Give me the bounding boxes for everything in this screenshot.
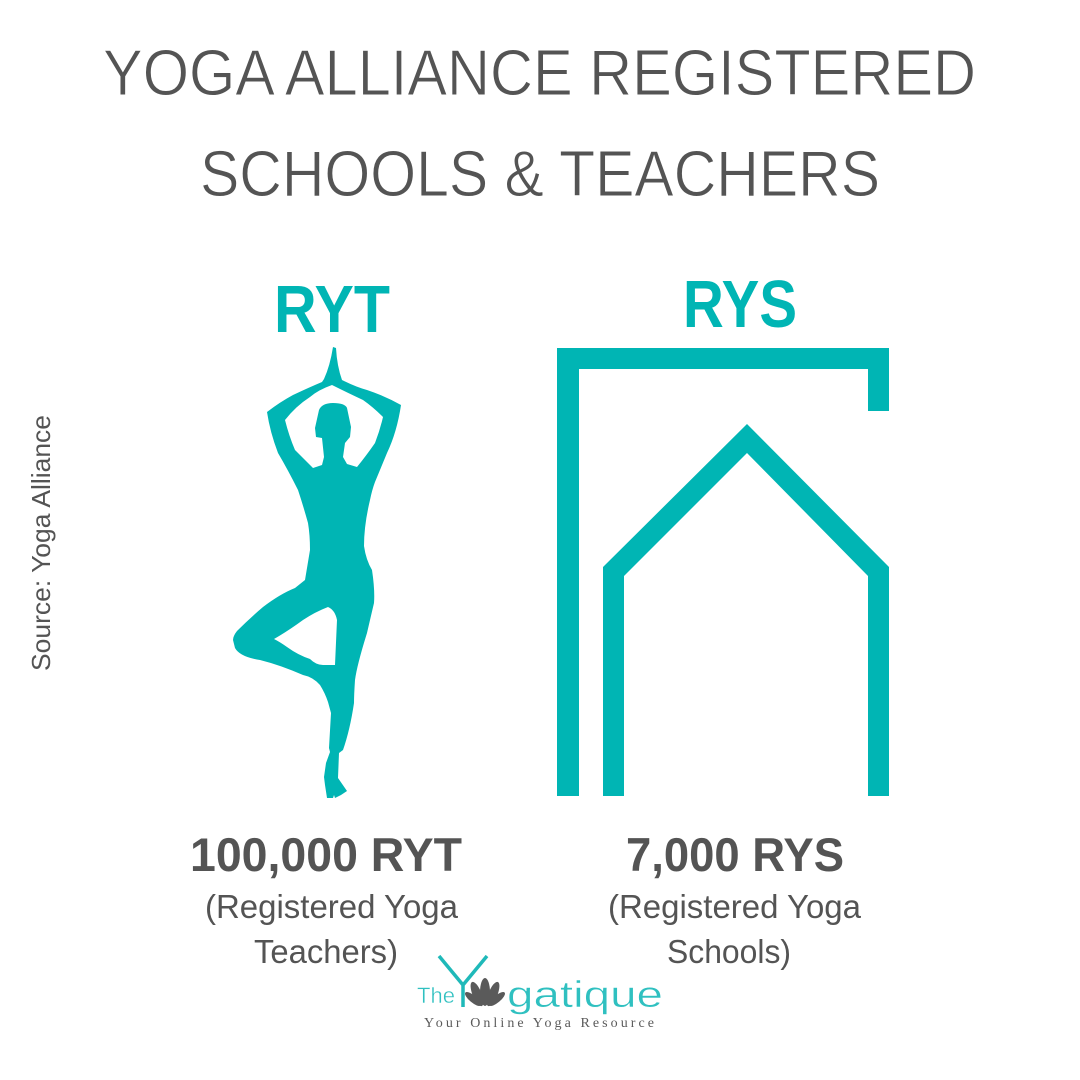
logo: The Yogatique: The [417,983,455,1008]
stat: RYS count: Schools) [667,933,791,970]
logo: The Yogatique [417,956,663,1031]
house outline [603,424,889,796]
title: SCHOOLS & TEACHERS [200,137,880,210]
stat: RYS count: (Registered Yoga [608,888,862,925]
stat: RYT count: 100,000 RYT [190,828,462,881]
icon: lotus [463,978,507,1008]
heading: RYT: RYT [274,272,390,347]
stat: RYS count: 7,000 RYS [626,828,844,881]
title: YOGA ALLIANCE REGISTERED [103,36,976,109]
heading: RYS: RYS [683,267,797,342]
logo: The Yogatique: Your Online Yoga Resource [424,1016,654,1031]
icon: yoga tree pose silhouette [233,347,401,798]
title [103,36,976,210]
source note: Source: Yoga Alliance [26,415,56,671]
stat: RYS count [608,828,862,970]
stat: RYT count: Teachers) [254,933,398,970]
building frame [557,348,889,796]
stat: RYT count [190,828,462,970]
icon: school building outline [557,348,889,796]
stat: RYT count: (Registered Yoga [205,888,459,925]
logo: The Yogatique: gatique [507,974,663,1015]
